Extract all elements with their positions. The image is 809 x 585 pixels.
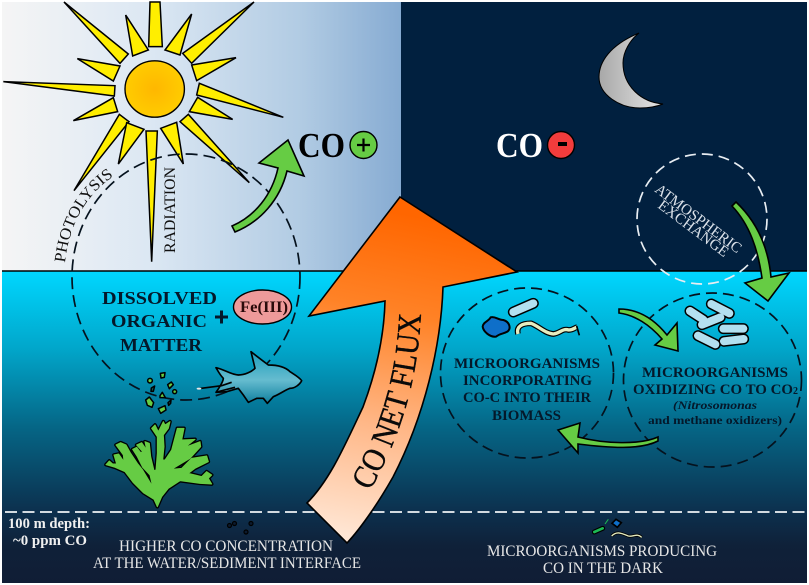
label: microorganisms oxidizing CO to CO2 [633,365,798,427]
icon: moon [599,33,663,108]
icon: sun with rays [3,2,283,262]
label: 100 m depth: 100 m depth: [8,516,90,532]
label: photolysis: PHOTOLYSIS [54,168,112,262]
label: microorganisms oxidizing CO to CO2: and methane oxidizers) [648,413,782,427]
arrow: CO released to the atmosphere [232,140,304,232]
label: CO minus [496,126,574,165]
dashed circle: atmospheric exchange [637,154,767,284]
dashed circle: photolysis zone [72,154,300,400]
divider: sediment interface [5,511,807,513]
panel: water column [2,271,807,583]
label: higher CO concentration: AT THE WATER/SEDIMENT INTERFACE [93,555,361,572]
icon: CO bubbles [228,522,253,534]
dashed circle: microorganisms incorporating CO-C [440,288,614,458]
label: plus sign [215,310,228,324]
label: dissolved organic matter: MATTER [120,335,203,355]
label: microorganisms oxidizing CO to CO2: OXIDIZING CO TO CO2 [633,382,798,398]
label: microorganisms producing CO in the dark: CO IN THE DARK [543,560,663,577]
icon: microbes in biomass circle [483,303,579,337]
label: microorganisms incorporating CO-C: INCORPORATING [463,373,592,389]
label: dissolved organic matter: DISSOLVED [102,288,217,308]
arrow: CO net flux [306,196,519,544]
label: CO plus: CO [298,126,345,165]
label: higher CO concentration [93,538,361,572]
label: CO minus: CO [496,126,543,165]
label: microorganisms oxidizing CO to CO2: (Nitrosomonas [673,398,757,412]
icon: seaweed [106,422,212,507]
icon: CO-oxidizing bacteria [690,304,744,344]
label: 100 m depth: ~0 ppm CO [13,533,87,549]
icon: fish [197,352,302,403]
panel: night sky [401,2,807,271]
label: dissolved organic matter: ORGANIC [111,311,207,331]
label: CO plus [298,126,377,165]
label: higher CO concentration: HIGHER CO CONCENTRATION [119,538,333,555]
label: microorganisms incorporating CO-C: CO-C INTO THEIR [463,390,591,406]
label: 100 m depth [8,516,90,549]
arrow: from oxidizers to biomass [558,423,658,453]
label: microorganisms incorporating CO-C: MICROORGANISMS [454,356,600,372]
icon: dark-producing microbes [594,519,642,537]
label: microorganisms producing CO in the dark [487,543,717,577]
label: CO net flux: CO NET FLUX [354,314,422,488]
label: microorganisms incorporating CO-C [454,356,600,424]
dashed circle: microorganisms oxidizing CO [624,293,802,467]
label: atmospheric exchange: EXCHANGE [655,197,731,261]
icon: iron III: Fe(III) [240,299,288,316]
label: microorganisms incorporating CO-C: BIOMASS [492,408,561,424]
label: microorganisms oxidizing CO to CO2: MICROORGANISMS [642,365,788,381]
label: radiation: RADIATION [162,167,179,253]
icon: iron III [234,290,292,324]
label: dissolved organic matter [102,288,217,355]
icon: algae fragments [146,373,177,413]
arrow: atmospheric exchange into water [732,202,789,301]
label: microorganisms producing CO in the dark: MICROORGANISMS PRODUCING [487,543,717,560]
label: atmospheric exchange: ATMOSPHERIC [652,181,744,257]
panel: daytime sky [2,2,401,271]
arrow: from biomass to oxidizers [619,309,678,351]
